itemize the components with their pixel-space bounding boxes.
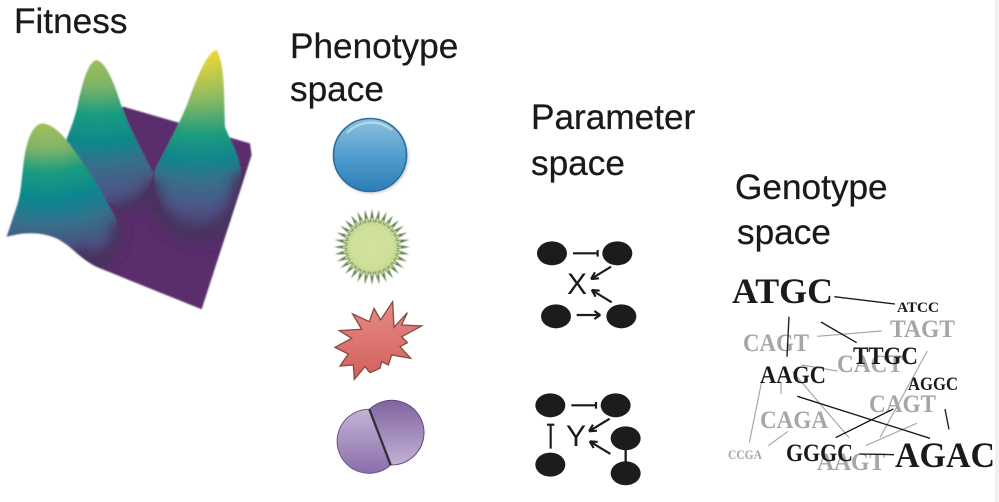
middle peak [66,60,153,210]
icon: red burst [335,302,422,379]
network edges: gray [749,331,927,446]
label: Y: Y [566,420,586,453]
gray sequences: TAGT [890,316,955,343]
icon: dividing purple cell [337,400,424,473]
heading: parameter space: Parameter [531,98,696,137]
icon: green spiky star [334,209,410,285]
gray sequences: CAGA [760,407,828,434]
heading: parameter space: space [531,144,625,183]
network Y [535,393,641,485]
heading: fitness: Fitness [14,2,127,41]
gray sequences: CAGT [743,330,809,357]
gray sequences: AAGT [817,449,885,476]
gray sequences: CACT [837,351,903,378]
black sequences: TTGC [853,343,918,370]
purple base plane [7,107,252,309]
panel: genotype space [728,168,995,476]
network X [537,241,636,328]
heading: genotype space: space [737,213,831,252]
panel: phenotype space [290,27,458,473]
black sequences: AGGC [908,374,958,395]
3D surface plot [7,50,252,309]
black sequences: AAGC [760,362,826,389]
right peak base shading [152,173,242,237]
network edges: black [787,297,949,455]
heading: phenotype space: Phenotype [290,27,458,66]
icon: blue circle [334,118,408,193]
heading: phenotype space: space [290,70,384,109]
gray sequences: CCGA [728,448,762,462]
left peak base shading [75,222,117,265]
black sequences: AGAC [895,435,995,475]
label: X: X [567,268,587,301]
right peak [155,50,241,238]
gray sequences [728,316,955,476]
heading: genotype space: Genotype [735,168,888,207]
panel: parameter space [531,98,696,485]
black sequences: ATGC [732,271,833,311]
middle peak base shading [117,180,154,209]
left peak [7,123,117,267]
black sequences: GGGC [786,440,853,467]
black sequences [732,271,995,475]
panel: fitness landscape [7,2,252,309]
gray sequences: CAGT [869,391,936,418]
black sequences: ATCC [897,300,939,316]
